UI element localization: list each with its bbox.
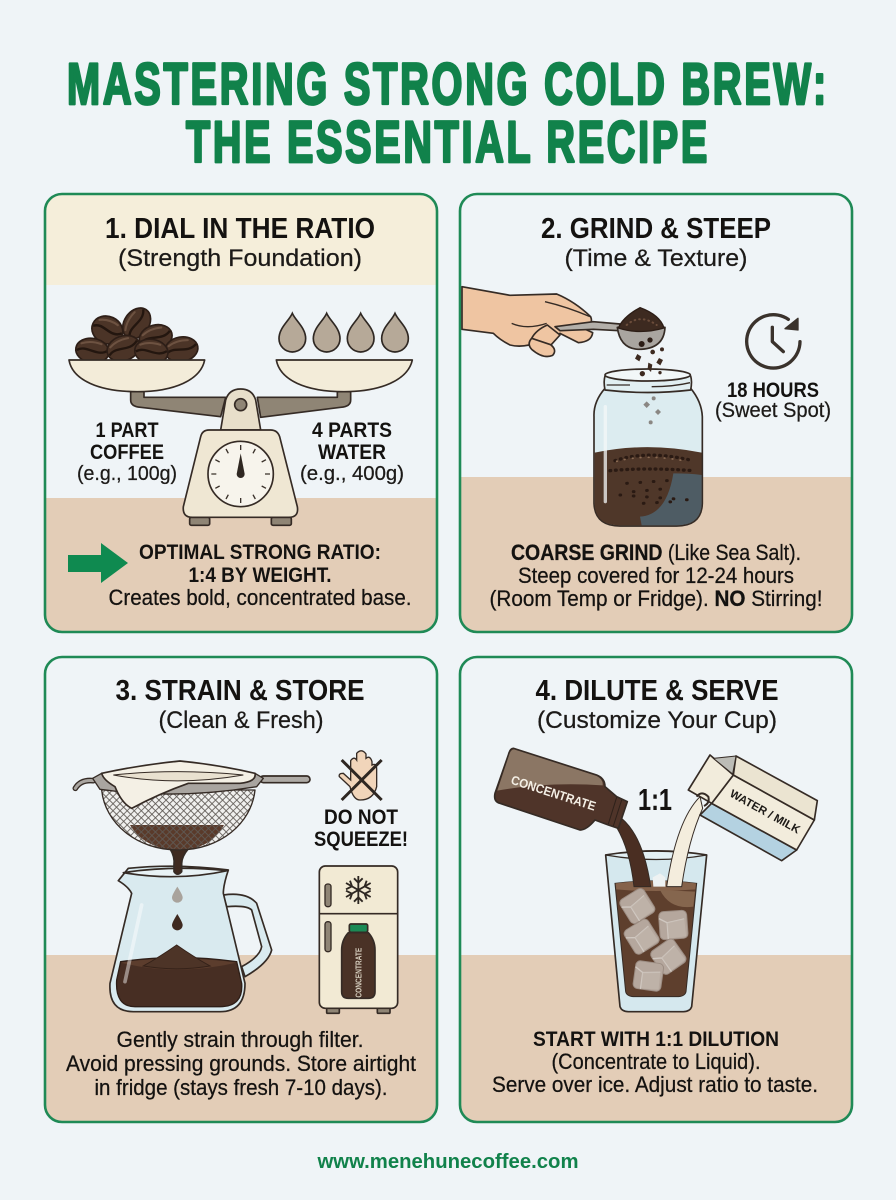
milk stream (667, 797, 703, 887)
label: 1:1 ratio: 1:1 (638, 782, 672, 817)
text block: optimal ratio: OPTIMAL STRONG RATIO: (139, 541, 381, 564)
heading: step 2 (541, 213, 771, 272)
label: do not squeeze: SQUEEZE! (314, 827, 408, 851)
text block: grind and steep instructions: COARSE GRIND (Like Sea Salt). (511, 540, 801, 565)
carafe (110, 866, 272, 1012)
icon: clock (747, 315, 800, 368)
illustration: strainer, carafe, warning and fridge (75, 751, 398, 1013)
label: 18 hours: 18 HOURS (727, 379, 819, 402)
glass (606, 851, 707, 1012)
icon: water drops (279, 313, 408, 352)
carafe coffee (117, 957, 242, 1007)
heading: step 1 (105, 213, 375, 272)
heading: step 3 (116, 675, 364, 734)
heading: step 4: 4. DILUTE & SERVE (536, 675, 778, 707)
drops (172, 887, 183, 903)
concentrate stream (617, 818, 651, 887)
coffee grounds (610, 455, 693, 503)
coffee mound (143, 945, 210, 969)
text block: optimal ratio: 1:4 BY WEIGHT. (188, 564, 332, 587)
bottle of concentrate: CONCENTRATE (509, 773, 598, 814)
panel: step 1 dial in the ratio (45, 194, 437, 632)
glass liquid (615, 881, 697, 997)
illustration: pouring into iced glass (495, 748, 817, 1012)
heading: step 2: 2. GRIND & STEEP (541, 213, 771, 245)
heading: step 3: (Clean & Fresh) (158, 707, 324, 734)
jar (594, 369, 702, 526)
icon: hand holding scoop (462, 287, 620, 356)
ice cubes (618, 887, 688, 992)
text block: optimal ratio: Creates bold, concentrated base. (108, 585, 412, 610)
label: do not squeeze (314, 805, 408, 851)
falling coffee grounds (635, 347, 664, 424)
icon: snowflake (346, 876, 371, 904)
text block: grind and steep instructions: Steep covered for 12-24 hours (518, 563, 794, 588)
scale beam (131, 392, 351, 417)
label: coffee amount: (e.g., 100g) (77, 462, 177, 485)
heading: step 2: (Time & Texture) (564, 245, 748, 272)
heading: step 4 (536, 675, 778, 734)
text block: optimal ratio (108, 541, 412, 610)
text block: strain instructions: in fridge (stays fresh 7-10 days). (94, 1075, 388, 1100)
label: coffee amount: 1 PART (96, 419, 159, 442)
heading: step 3: 3. STRAIN & STORE (116, 675, 364, 707)
bottle of concentrate (342, 924, 375, 998)
filter cloth (102, 761, 255, 808)
ice peak (653, 873, 665, 887)
heading: step 1: (Strength Foundation) (118, 245, 362, 272)
text block: grind and steep instructions (490, 540, 822, 611)
icon: do not squeeze hand (339, 751, 382, 800)
panel: step 4 dilute and serve (460, 657, 852, 1122)
footer: website: www.menehunecoffee.com (316, 1151, 578, 1173)
scale dial (208, 441, 273, 507)
icon: scoop with coffee grounds (617, 308, 665, 349)
label: do not squeeze: DO NOT (324, 805, 398, 829)
label: coffee amount: COFFEE (90, 441, 164, 464)
label: 18 hours: (Sweet Spot) (715, 399, 831, 422)
text block: strain instructions: Avoid pressing grounds. Store airtight (66, 1051, 416, 1076)
illustration: balance scale with beans and water drops (69, 303, 412, 525)
jar coffee (595, 447, 702, 525)
jar water tint (640, 473, 702, 525)
right bowl (276, 360, 412, 392)
strainer (75, 761, 310, 874)
text block: dilution instructions: START WITH 1:1 DILUTION (533, 1028, 779, 1051)
heading: step 1: 1. DIAL IN THE RATIO (105, 213, 375, 245)
icon: coffee beans (74, 303, 200, 366)
label: water amount: 4 PARTS (312, 419, 392, 442)
label: water amount (300, 419, 404, 485)
fridge (319, 866, 398, 1013)
text block: grind and steep instructions: (Room Temp or Fridge). NO Stirring! (490, 586, 822, 611)
milk carton: WATER / MILK (728, 788, 803, 837)
title (67, 52, 829, 175)
illustration: hand, scoop and jar (462, 287, 800, 526)
text block: dilution instructions: (Concentrate to Liquid). (552, 1049, 760, 1074)
milk carton (688, 755, 817, 861)
bottle of concentrate (495, 748, 627, 830)
text block: strain instructions (66, 1027, 416, 1100)
bottle of concentrate: CONCENTRATE (353, 948, 363, 998)
panel: step 3 strain and store (45, 657, 437, 1122)
panel: step 2 grind and steep (460, 194, 852, 632)
scale feet (190, 517, 291, 525)
scale body (183, 430, 298, 517)
text block: strain instructions: Gently strain through filter. (116, 1027, 364, 1052)
label: 18 hours (715, 379, 831, 422)
label: water amount: WATER (318, 441, 386, 464)
scale pivot (221, 389, 261, 430)
text block: dilution instructions (492, 1028, 818, 1097)
arrow (68, 543, 128, 583)
text block: dilution instructions: Serve over ice. Adjust ratio to taste. (492, 1072, 818, 1097)
heading: step 4: (Customize Your Cup) (537, 707, 777, 734)
label: coffee amount (77, 419, 177, 485)
label: water amount: (e.g., 400g) (300, 462, 404, 485)
left bowl (69, 360, 205, 392)
